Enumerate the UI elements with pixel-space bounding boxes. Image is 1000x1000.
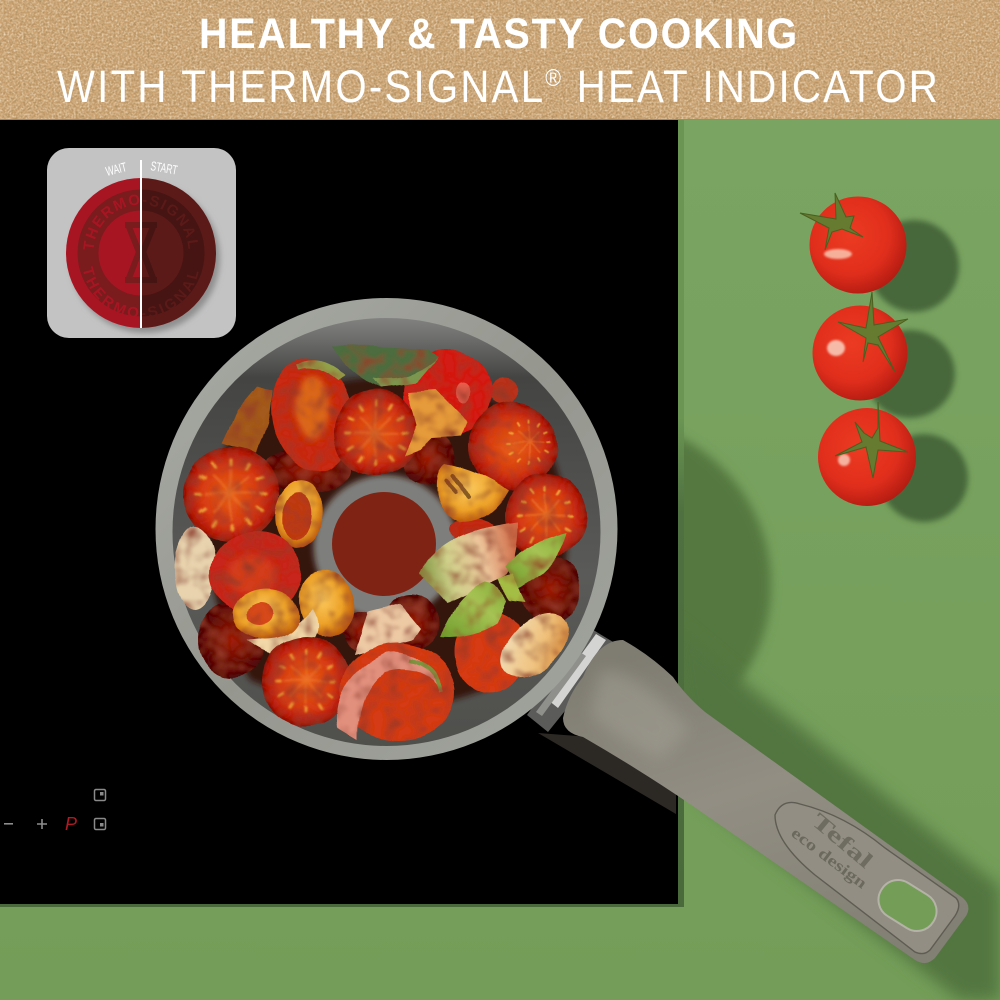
indicator markings: left half [78,190,140,316]
label wait: WAIT [104,159,128,179]
indicator markings: left half: THERMO-SIGNAL [83,194,140,250]
food [175,346,588,741]
yellow tomato [290,563,364,645]
icon: timer bottom [94,818,106,830]
frying pan [156,298,968,963]
handle bracket [527,628,676,814]
icon: timer top [94,790,106,800]
handle hole [871,873,944,938]
slice right upper [469,402,557,490]
thermo-signal centre spot [332,492,436,596]
tomato lower left [210,532,302,614]
icon: plus [37,819,47,829]
handle inset panel [775,802,959,954]
indicator markings: right half: THERMO-SIGNAL [142,196,198,249]
tomato shadows [865,220,968,522]
divider [140,160,142,328]
slice bottom right [454,610,526,694]
garlic bottom right [489,600,581,690]
heading line 2: ® [545,65,563,92]
basil sprig [440,532,567,637]
dark oil ring under food [207,378,568,709]
label start: START [149,158,179,178]
logo subtext: eco design [788,825,870,892]
shadows on worktop [441,420,1000,1000]
dark basil leaf [332,346,439,388]
tomato 2 [812,292,908,400]
heading line 2: WITH THERMO-SIGNAL [57,61,604,112]
slice bottom left [261,636,351,726]
whole tomato top [403,349,491,437]
green tomato wedge [420,522,518,603]
pan handle [563,640,968,963]
yellow tomato charred [437,463,508,522]
slice centre top [333,390,419,476]
indicator markings: right half [142,190,204,316]
indicator disc: start half [141,178,216,328]
large slice bottom centre [337,643,455,741]
cooktop controls [4,790,106,834]
onion wedge [246,607,317,655]
yellow roasted half [271,477,327,551]
slice right [504,474,588,558]
logo text: Tefal [807,808,878,873]
onion piece bottom [355,604,420,655]
pan rim [156,298,618,760]
garlic and onion top [404,390,468,456]
pan floor [235,390,535,690]
indicator disc: wait half [66,178,141,328]
indicator markings: right half: THERMO-SIGNAL [142,272,198,316]
dark roasted tomatoes [198,379,580,677]
tomato 3 [818,402,916,506]
heading line 1: HEALTHY & TASTY COOKING [199,10,799,58]
roasted wedge top left [222,385,272,453]
kraft paper banner [0,0,1000,119]
handle highlight [590,670,690,760]
indicator markings: left half: THERMO-SIGNAL [84,266,138,316]
title [57,10,940,112]
slice left [183,446,279,542]
tomato group [800,193,968,522]
large tomato half [261,351,363,479]
indicator shadow [70,183,220,333]
tomato 1 [800,193,906,294]
Thermo-Signal indicator panel [47,148,236,338]
yellow half with sauce [233,589,299,639]
garlic left [175,527,215,611]
heading line 2: HEAT INDICATOR [563,61,940,112]
label: P: P [65,814,77,834]
pan inner wall [172,318,600,746]
induction cooktop [0,120,684,907]
icon: minus [4,823,13,825]
